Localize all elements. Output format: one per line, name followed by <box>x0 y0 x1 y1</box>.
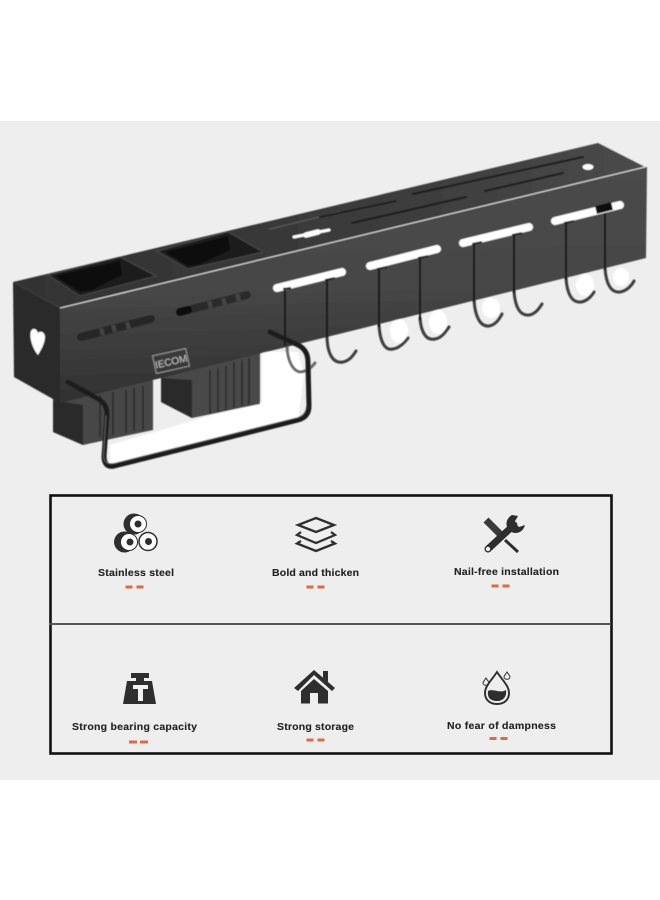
rail: top face <box>13 143 645 308</box>
icon: house <box>294 670 335 704</box>
feature: bold and thicken <box>272 518 359 587</box>
logo badge: IECOM <box>154 354 189 371</box>
label: Bold and thicken <box>272 567 359 579</box>
icon: stacked layers <box>297 518 335 551</box>
accent dashes <box>129 740 148 744</box>
rail: front face <box>60 167 647 403</box>
label: Nail-free installation <box>454 566 559 578</box>
accent dashes <box>306 738 324 742</box>
accent dashes <box>306 586 324 588</box>
white reflections under rail <box>110 268 629 466</box>
label: Strong storage <box>277 721 354 733</box>
logo badge <box>152 349 190 373</box>
towel bar <box>68 332 309 466</box>
feature: strong storage <box>277 670 354 740</box>
feature: nail-free installation <box>454 515 559 586</box>
heart cut-out <box>30 329 45 355</box>
rail highlight edge <box>60 167 645 308</box>
storage containers <box>53 352 260 445</box>
label: Strong bearing capacity <box>72 721 197 733</box>
label: Stainless steel <box>98 567 174 579</box>
accent dashes <box>490 737 508 740</box>
top face slots <box>270 157 583 237</box>
accent dashes <box>126 586 144 588</box>
feature: strong bearing capacity <box>72 673 197 742</box>
feature panel frame <box>50 496 612 754</box>
icon: weight <box>123 673 156 704</box>
accent dashes <box>492 584 510 588</box>
product photo: wall-mounted rack <box>13 143 647 466</box>
label: No fear of dampness <box>447 720 556 732</box>
top organiser boxes <box>48 232 263 296</box>
feature: no fear of dampness <box>447 672 556 738</box>
feature: stainless steel <box>98 514 174 587</box>
hook stems <box>283 213 605 346</box>
rail: left end face <box>13 282 60 403</box>
hook ends <box>287 268 634 372</box>
background panel <box>0 121 660 780</box>
icon: steel rolls <box>114 514 157 552</box>
row divider <box>49 623 611 625</box>
icon: wrench and screwdriver <box>486 515 525 552</box>
icon: water drop <box>483 672 510 704</box>
front slots <box>81 205 620 337</box>
